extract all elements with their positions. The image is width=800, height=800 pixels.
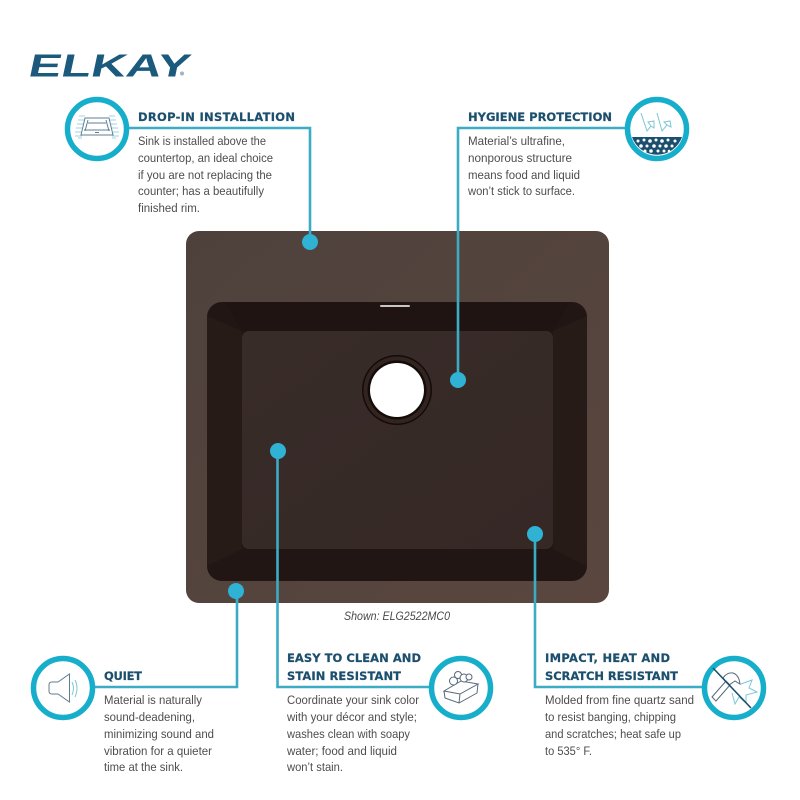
- logo: Elkay: [26, 48, 195, 83]
- body text: time at the sink.: [104, 760, 183, 774]
- product photo: sink: [186, 231, 609, 603]
- heading: SCRATCH RESISTANT: [545, 669, 678, 683]
- connector line: [535, 534, 708, 687]
- heading: QUIET: [104, 669, 142, 683]
- body text: Coordinate your sink color: [287, 693, 419, 707]
- basin floor: [242, 331, 553, 549]
- callout: drop-in installation: [68, 100, 318, 250]
- marker dot: [527, 526, 543, 542]
- heading: STAIN RESISTANT: [287, 669, 401, 683]
- callout: impact, heat and scratch resistant: [527, 526, 764, 758]
- body text: Material’s ultrafine,: [468, 134, 565, 148]
- body text: [138, 134, 273, 215]
- body text: minimizing sound and: [104, 727, 214, 741]
- heading: DROP-IN INSTALLATION: [138, 110, 295, 124]
- callout: hygiene protection: [450, 100, 686, 388]
- body text: [545, 693, 694, 758]
- body text: water; food and liquid: [286, 744, 397, 758]
- body text: and scratches; heat safe up: [545, 727, 681, 741]
- body text: [104, 693, 214, 774]
- connector line: [92, 591, 237, 687]
- body text: washes clean with soapy: [286, 727, 411, 741]
- body text: to resist banging, chipping: [545, 710, 676, 724]
- basin top wall: [225, 302, 570, 331]
- drain: [362, 355, 432, 425]
- connector line: [278, 451, 434, 687]
- connector line: [125, 128, 310, 242]
- heading: [545, 651, 678, 683]
- icon: nonporous surface: [628, 100, 686, 158]
- body text: Molded from fine quartz sand: [545, 693, 694, 707]
- overflow slot: [380, 305, 410, 307]
- callout: easy to clean: [270, 443, 490, 774]
- sink basin: [207, 302, 587, 581]
- marker dot: [302, 234, 318, 250]
- callout: quiet: [34, 583, 244, 774]
- marker dot: [228, 583, 244, 599]
- body text: means food and liquid: [468, 168, 580, 182]
- body text: [467, 134, 580, 198]
- body text: nonporous structure: [468, 151, 572, 165]
- heading: IMPACT, HEAT AND: [545, 651, 670, 665]
- body text: finished rim.: [138, 201, 200, 215]
- body text: to 535° F.: [545, 744, 592, 758]
- body text: with your décor and style;: [286, 710, 417, 724]
- icon: soap bar: [432, 658, 490, 718]
- body text: Sink is installed above the: [138, 134, 266, 148]
- marker dot: [270, 443, 286, 459]
- body text: countertop, an ideal choice: [138, 151, 273, 165]
- marker dot: [450, 372, 466, 388]
- icon: drop-in sink: [68, 100, 126, 158]
- heading: HYGIENE PROTECTION: [468, 110, 612, 124]
- body text: Material is naturally: [104, 693, 203, 707]
- body text: sound-deadening,: [104, 710, 195, 724]
- body text: if you are not replacing the: [138, 168, 272, 182]
- body text: won’t stick to surface.: [467, 184, 575, 198]
- body text: counter; has a beautifully: [138, 184, 265, 198]
- icon: hammer crossed out: [704, 658, 764, 718]
- basin left wall: [207, 316, 242, 566]
- logo: Elkay: ELKAY: [26, 48, 195, 83]
- basin right wall: [553, 316, 587, 566]
- sink rim: [186, 231, 609, 603]
- body text: [286, 693, 419, 774]
- heading: [287, 651, 421, 683]
- icon: speaker: [34, 658, 92, 718]
- body text: won’t stain.: [286, 760, 343, 774]
- body text: vibration for a quieter: [104, 744, 212, 758]
- connector line: [458, 128, 628, 380]
- heading: EASY TO CLEAN AND: [287, 651, 421, 665]
- caption: model shown: Shown: ELG2522MC0: [344, 609, 450, 623]
